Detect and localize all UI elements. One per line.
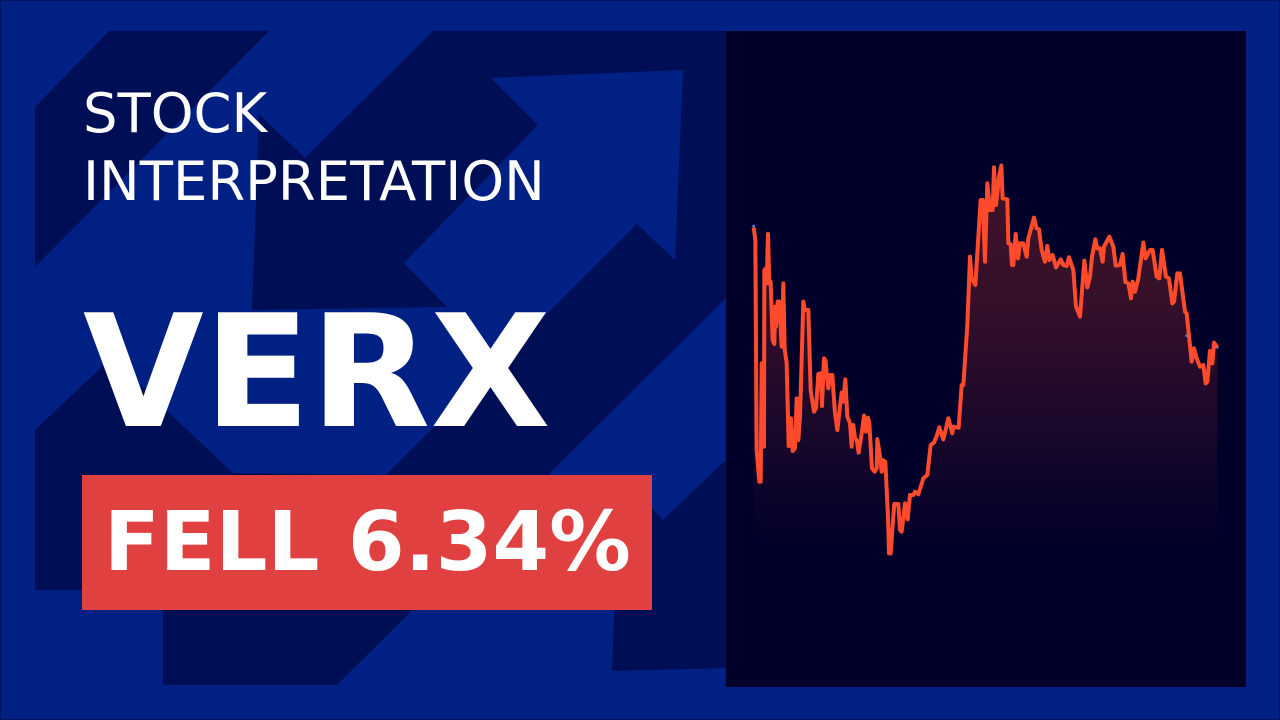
panel: price chart	[726, 31, 1246, 687]
ticker: VERX: VERX	[83, 281, 551, 463]
arrow shape: center	[35, 31, 730, 685]
badge text: FELL 6.34%	[104, 494, 631, 590]
heading: stock interpretation: INTERPRETATION	[83, 150, 545, 213]
heading: stock interpretation	[83, 82, 545, 213]
arrow shape: top left	[35, 31, 269, 267]
chart price line	[754, 166, 1217, 553]
badge: fell 6.34%	[82, 475, 652, 610]
heading: stock interpretation: STOCK	[83, 82, 267, 145]
chart data markers	[752, 163, 1219, 516]
arrow shape: lower right	[612, 456, 730, 671]
chart area fill	[754, 166, 1217, 553]
